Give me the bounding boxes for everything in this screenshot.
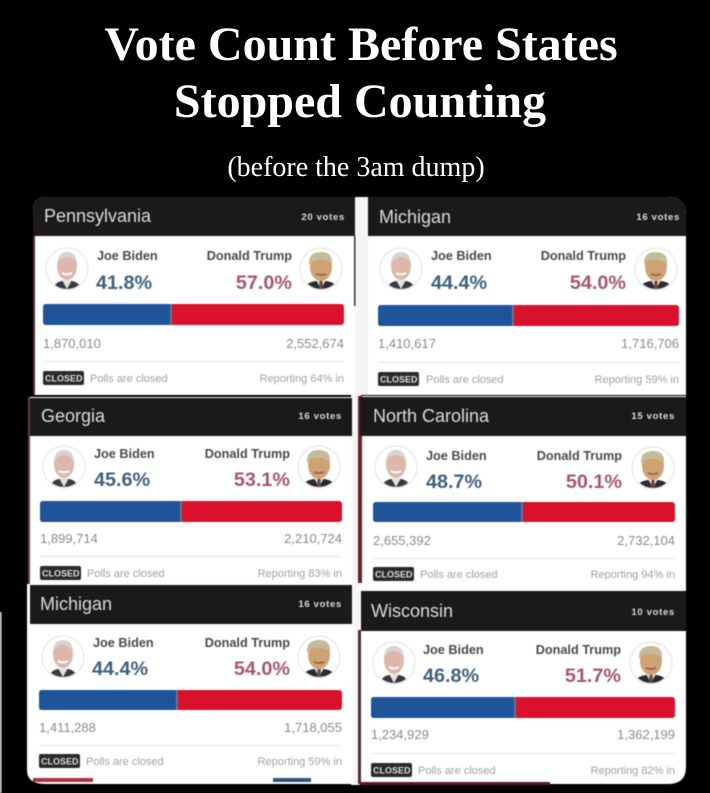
- status footer: CLOSED: [373, 766, 411, 776]
- status footer: CLOSED: [42, 568, 80, 578]
- candidate: Donald Trump 53.1%: [205, 447, 290, 491]
- candidate: Donald Trump 57.0%: [207, 249, 292, 294]
- candidate: Joe Biden 48.7%: Joe Biden: [426, 449, 487, 463]
- candidate: Donald Trump 54.0%: 54.0%: [570, 272, 626, 294]
- panel: Pennsylvania: [33, 197, 356, 395]
- subtitle: (before the 3am dump): [227, 152, 485, 183]
- candidate: Joe Biden 44.4%: [431, 249, 492, 294]
- candidate: Joe Biden 46.8%: 46.8%: [423, 665, 480, 687]
- candidate: Donald Trump 57.0%: Donald Trump: [207, 249, 292, 263]
- vote counts: 1,718,055: [284, 720, 342, 735]
- status footer: Polls are closed: [90, 373, 168, 385]
- candidate: Donald Trump 54.0%: [541, 249, 626, 294]
- candidate: Donald Trump 54.0%: Donald Trump: [541, 249, 626, 263]
- vote counts: 1,870,010: [43, 336, 101, 351]
- header: Michigan: Michigan: [40, 594, 112, 614]
- header: Wisconsin: 10 votes: [631, 607, 675, 618]
- panel: Michigan (second): [27, 584, 353, 784]
- vote share bar: [371, 697, 675, 718]
- candidate: Joe Biden 44.4%: [92, 636, 154, 680]
- icon: Joe Biden portrait: [380, 248, 422, 290]
- candidate: Joe Biden 44.4%: Joe Biden: [93, 636, 154, 650]
- candidate: Joe Biden 45.6%: 45.6%: [94, 469, 151, 491]
- icon: Donald Trump portrait: [635, 248, 677, 290]
- header: North Carolina: North Carolina: [373, 406, 490, 426]
- icon: Joe Biden portrait: [42, 636, 84, 678]
- vote counts: 1,899,714: [40, 531, 98, 546]
- vote counts: [373, 533, 675, 548]
- status footer: Polls are closed: [426, 374, 504, 386]
- status footer: Reporting 64% in: [260, 373, 344, 385]
- candidate: Donald Trump 51.7%: Donald Trump: [536, 643, 621, 657]
- status footer: CLOSED: [41, 756, 79, 766]
- status footer: Reporting 59% in: [258, 756, 342, 768]
- status footer: CLOSED: [375, 570, 413, 580]
- vote share bar: [39, 690, 342, 710]
- header: Wisconsin: Wisconsin: [371, 601, 453, 621]
- vote share bar: [378, 305, 679, 326]
- vote counts: [39, 720, 342, 735]
- icon: Donald Trump portrait: [632, 447, 674, 489]
- icon: Donald Trump portrait: [298, 636, 340, 678]
- candidate: Joe Biden 41.8%: Joe Biden: [97, 249, 158, 263]
- vote share bar: [373, 502, 675, 522]
- candidate: Donald Trump 53.1%: Donald Trump: [205, 447, 290, 461]
- candidate: Joe Biden 48.7%: 48.7%: [426, 471, 483, 493]
- header: Michigan: 16 votes: [636, 212, 680, 223]
- status footer: CLOSED: [45, 374, 83, 384]
- vote counts: [378, 336, 679, 351]
- vote share bar: [43, 304, 344, 325]
- header: Michigan: [368, 197, 686, 236]
- panel: Wisconsin: [358, 591, 686, 785]
- vote counts: [371, 727, 675, 742]
- icon: Joe Biden portrait: [375, 446, 417, 488]
- icon: Joe Biden portrait: [373, 642, 415, 684]
- status footer: [39, 754, 342, 768]
- status footer: Reporting 94% in: [591, 569, 675, 581]
- header: North Carolina: 15 votes: [631, 411, 675, 422]
- vote counts: 1,234,929: [371, 727, 429, 742]
- candidate: Joe Biden 48.7%: [426, 449, 487, 493]
- candidate: Donald Trump 54.0%: Donald Trump: [205, 636, 290, 650]
- icon: Donald Trump portrait: [300, 248, 342, 290]
- vote counts: 1,362,199: [617, 727, 675, 742]
- status footer: Polls are closed: [87, 568, 165, 580]
- candidate: Donald Trump 50.1%: [537, 449, 622, 493]
- candidate: Joe Biden 45.6%: [94, 447, 155, 491]
- header: Pennsylvania: Pennsylvania: [44, 206, 152, 226]
- vote counts: 2,210,724: [284, 531, 342, 546]
- status footer: [373, 567, 675, 581]
- candidate: Joe Biden 44.4%: 44.4%: [92, 658, 149, 680]
- title: Stopped Counting: [174, 75, 546, 128]
- header: Michigan: Michigan: [379, 207, 451, 227]
- vote counts: 1,410,617: [378, 336, 436, 351]
- status footer: Reporting 82% in: [591, 765, 675, 777]
- panel: Georgia: [28, 397, 352, 587]
- panel: Michigan: [368, 197, 686, 395]
- candidate: Donald Trump 51.7%: [536, 643, 621, 687]
- candidate: Joe Biden 45.6%: Joe Biden: [94, 447, 155, 461]
- candidate: Joe Biden 44.4%: 44.4%: [431, 272, 488, 294]
- icon: Donald Trump portrait: [630, 642, 672, 684]
- vote counts: 2,552,674: [286, 336, 344, 351]
- title: [104, 18, 618, 128]
- candidate: Donald Trump 54.0%: [205, 636, 290, 680]
- panel: North Carolina: [358, 396, 686, 592]
- status footer: [378, 372, 679, 386]
- candidate: Donald Trump 53.1%: 53.1%: [234, 469, 290, 491]
- header: Georgia: 16 votes: [298, 411, 342, 422]
- icon: Joe Biden portrait: [43, 446, 85, 488]
- status footer: Polls are closed: [86, 756, 164, 768]
- candidate: Donald Trump 57.0%: 57.0%: [236, 272, 292, 294]
- candidate: Donald Trump 50.1%: 50.1%: [566, 471, 622, 493]
- vote counts: 2,655,392: [373, 533, 431, 548]
- header: Michigan: 16 votes: [298, 599, 342, 610]
- status footer: [371, 763, 675, 777]
- icon: Donald Trump portrait: [298, 446, 340, 488]
- header: Michigan: [30, 585, 352, 624]
- vote counts: 2,732,104: [617, 533, 675, 548]
- vote counts: 1,411,288: [39, 720, 96, 735]
- header: Georgia: [30, 398, 352, 436]
- vote counts: 1,716,706: [621, 336, 679, 351]
- icon: Joe Biden portrait: [46, 248, 88, 290]
- status footer: [40, 566, 342, 580]
- candidate: Joe Biden 46.8%: Joe Biden: [423, 643, 484, 657]
- title: Vote Count Before States: [104, 18, 618, 71]
- vote share bar: [40, 501, 342, 522]
- status footer: [43, 371, 344, 385]
- status footer: CLOSED: [380, 374, 418, 384]
- candidate: Joe Biden 46.8%: [423, 643, 484, 687]
- vote counts: [43, 336, 344, 351]
- header: North Carolina: [360, 397, 686, 436]
- header: Pennsylvania: [33, 197, 355, 236]
- vote counts: [40, 531, 342, 546]
- candidate: Joe Biden 44.4%: Joe Biden: [431, 249, 492, 263]
- candidate: Donald Trump 54.0%: 54.0%: [234, 658, 290, 680]
- status footer: Polls are closed: [420, 569, 498, 581]
- status footer: Reporting 59% in: [595, 374, 679, 386]
- candidate: Joe Biden 41.8%: 41.8%: [96, 272, 153, 294]
- candidate: Joe Biden 41.8%: [96, 249, 158, 294]
- candidate: Donald Trump 51.7%: 51.7%: [565, 665, 621, 687]
- status footer: Reporting 83% in: [258, 568, 342, 580]
- header: Wisconsin: [361, 591, 686, 631]
- status footer: Polls are closed: [418, 765, 496, 777]
- header: Pennsylvania: 20 votes: [301, 212, 345, 223]
- candidate: Donald Trump 50.1%: Donald Trump: [537, 449, 622, 463]
- header: Georgia: Georgia: [41, 406, 106, 426]
